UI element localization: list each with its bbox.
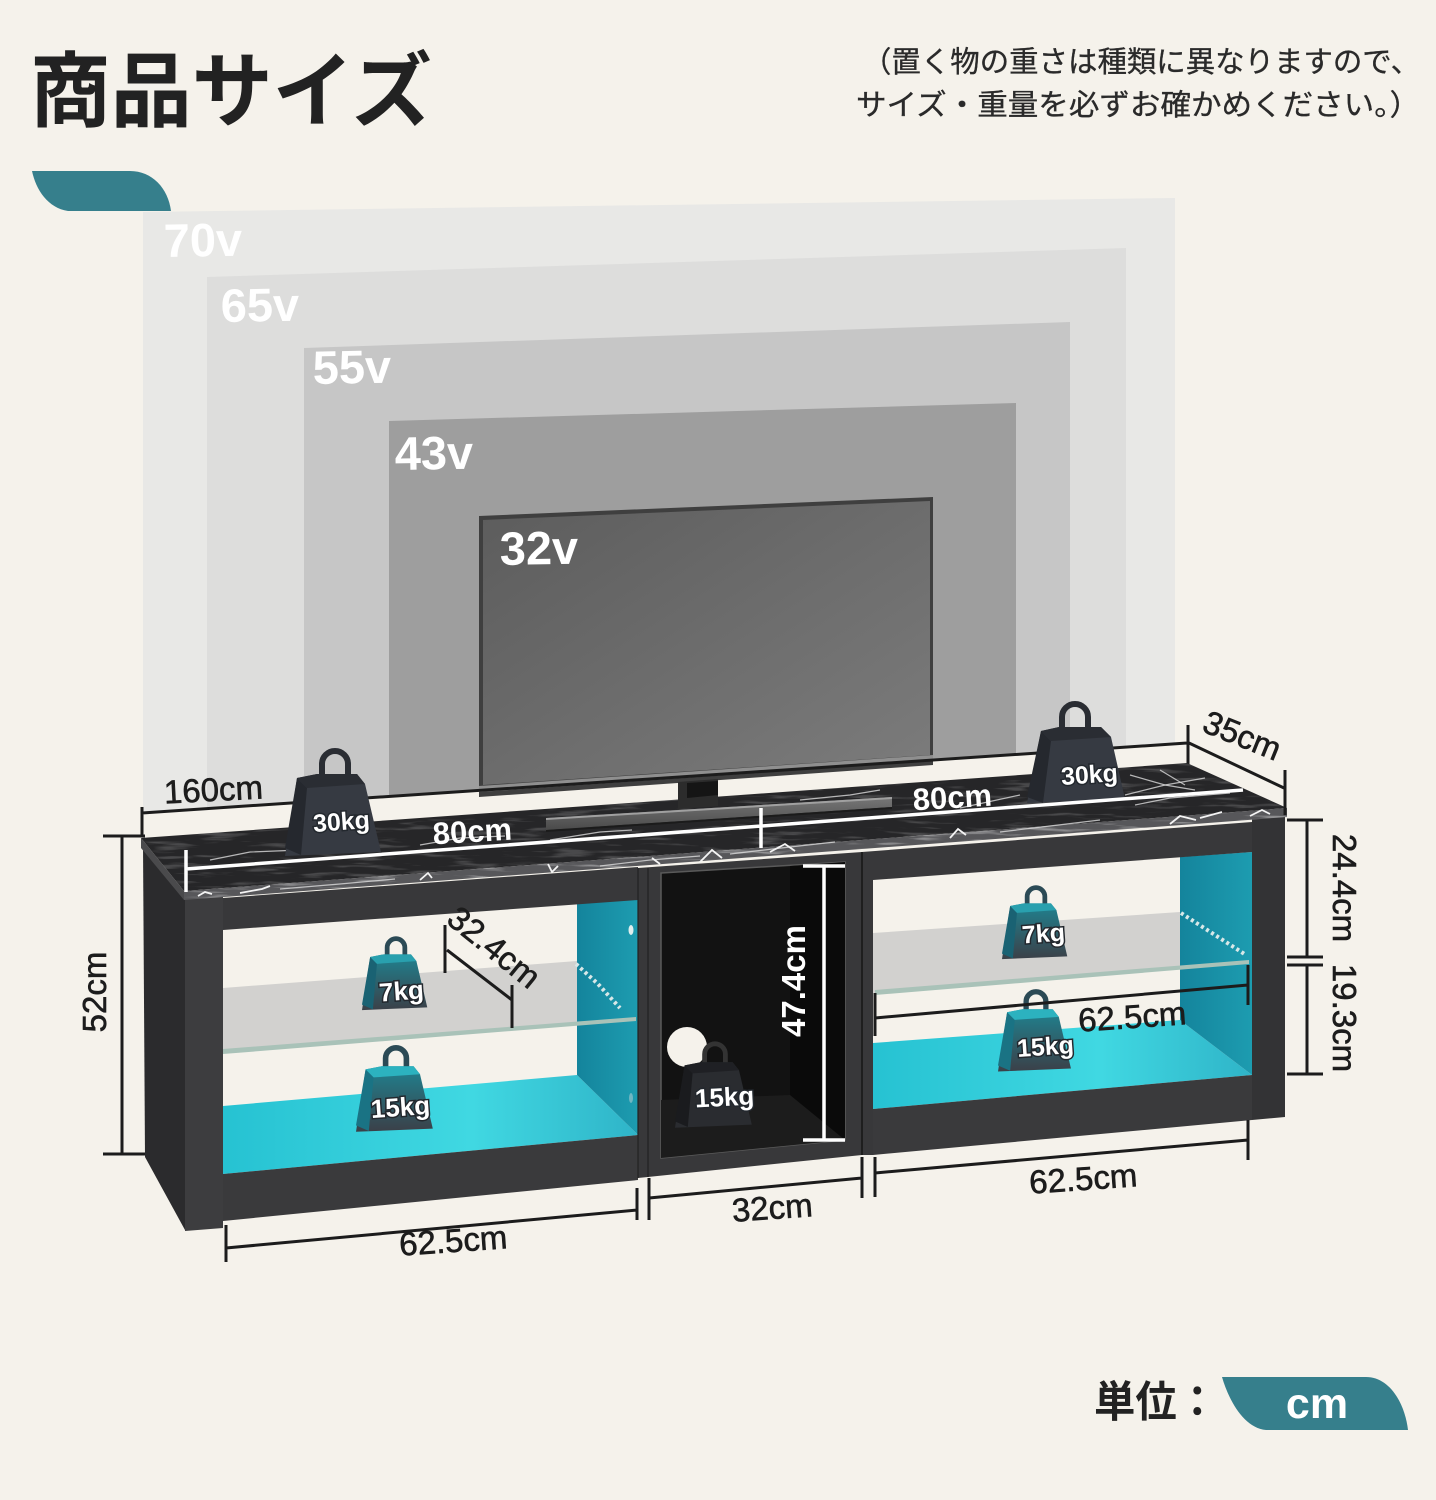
dimension: 24.4cm: 24.4cm bbox=[1326, 834, 1363, 942]
32v television bbox=[479, 497, 933, 797]
size labels: 70v bbox=[163, 213, 243, 267]
white dimension: 47.4cm bbox=[775, 865, 845, 1140]
marble front edge veins bbox=[198, 810, 1270, 896]
white dimension: 80cm + 80cm: 80cm bbox=[432, 812, 513, 851]
left side panel bbox=[143, 845, 185, 1230]
weight labels: 15kg bbox=[1016, 1031, 1075, 1063]
dimension: 19.3cm: 19.3cm bbox=[1326, 964, 1363, 1072]
dimension: shelf 62.5cm bbox=[875, 965, 1248, 1039]
white dimension: 80cm + 80cm: 80cm bbox=[912, 778, 993, 817]
white dimension: 47.4cm: 47.4cm bbox=[775, 925, 812, 1037]
dimension: bottom left 62.5cm bbox=[226, 1188, 637, 1263]
size labels: 32v bbox=[499, 521, 579, 575]
weight labels: 15kg bbox=[694, 1080, 755, 1114]
title: 商品サイズ bbox=[30, 47, 432, 138]
dimension: bottom right 62.5cm bbox=[875, 1120, 1248, 1201]
weight: 30kg left bbox=[285, 751, 381, 856]
size labels: 43v bbox=[394, 426, 474, 480]
note text: サイズ・重量を必ずお確かめください。） bbox=[856, 89, 1420, 122]
weight labels: 30kg bbox=[1060, 759, 1119, 791]
dimension: 24.4cm bbox=[1287, 820, 1363, 957]
tv stand base bbox=[546, 779, 892, 832]
70v screen bbox=[143, 198, 1175, 813]
dimension: 35cm bbox=[1189, 703, 1287, 815]
size labels: 65v bbox=[220, 278, 300, 332]
left rails bbox=[223, 867, 638, 930]
note text: （置く物の重さは種類に異なりますので、 bbox=[862, 46, 1420, 79]
marble top bbox=[141, 763, 1287, 900]
note text bbox=[856, 46, 1420, 122]
unit badge bbox=[1222, 1377, 1408, 1430]
dimension: 32.4cm: 32.4cm bbox=[441, 899, 548, 995]
weight: 30kg right bbox=[1027, 704, 1125, 803]
dimension: 35cm: 35cm bbox=[1198, 703, 1287, 768]
weight labels bbox=[312, 759, 1119, 1124]
weight: 7kg right bbox=[1002, 888, 1067, 959]
right leg bbox=[1252, 816, 1285, 1120]
65v screen bbox=[207, 248, 1126, 809]
weight: 15kg center bbox=[675, 1044, 752, 1128]
dimension: shelf 62.5cm: 62.5cm bbox=[1077, 994, 1187, 1039]
dimension: 19.3cm bbox=[1287, 964, 1363, 1074]
dimension: 160cm bbox=[142, 725, 1188, 836]
weight: 15kg left bbox=[356, 1048, 433, 1132]
unit label: 単位： bbox=[1094, 1379, 1218, 1427]
left compartment bbox=[223, 897, 638, 1174]
right rails and divider bbox=[862, 822, 1252, 1155]
dimension: bottom right 62.5cm: 62.5cm bbox=[1028, 1156, 1138, 1201]
dimension: 52cm bbox=[76, 836, 145, 1154]
left leg bbox=[185, 893, 223, 1231]
dimension: 32cm: 32cm bbox=[731, 1186, 814, 1229]
weight labels: 15kg bbox=[370, 1090, 431, 1124]
tv size comparison bbox=[143, 198, 1175, 813]
weight labels: 30kg bbox=[312, 806, 371, 838]
right compartment bbox=[873, 852, 1252, 1109]
weight labels: 7kg bbox=[1021, 919, 1066, 949]
weight labels: 7kg bbox=[378, 974, 425, 1008]
unit badge: cm bbox=[1286, 1380, 1348, 1428]
55v screen bbox=[304, 322, 1070, 802]
dimension: bottom left 62.5cm: 62.5cm bbox=[398, 1218, 508, 1263]
teal tab bbox=[32, 171, 171, 211]
white dimension: 80cm + 80cm bbox=[186, 778, 1243, 892]
43v screen bbox=[389, 403, 1016, 796]
dimension: 32cm bbox=[649, 1157, 862, 1229]
weight: 7kg left bbox=[362, 939, 427, 1010]
size labels: 55v bbox=[312, 340, 392, 394]
center compartment bbox=[638, 852, 862, 1178]
dimension: 160cm: 160cm bbox=[163, 768, 264, 811]
tv stand cabinet bbox=[141, 763, 1287, 1231]
size labels bbox=[163, 213, 579, 575]
weight: 15kg right bbox=[998, 992, 1071, 1072]
dimension: 52cm: 52cm bbox=[76, 952, 113, 1032]
